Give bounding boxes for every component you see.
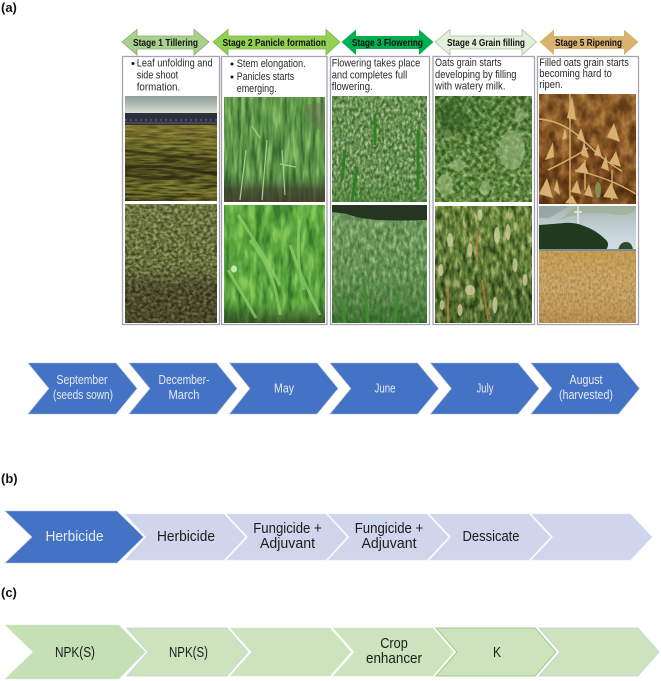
chevron: June (330, 363, 438, 414)
chevron: July (430, 363, 539, 414)
text: stage 1 description (132, 58, 213, 93)
photo: oat grains filling (435, 96, 532, 202)
panel: stage 2 panicle formation (222, 56, 327, 324)
chevron: NPK(S) (126, 628, 248, 676)
chevron: fungicide + adjuvant (226, 514, 347, 560)
chevron: September: September (56, 373, 108, 387)
text: stage 2 description (230, 58, 306, 95)
text: stage 3 description (332, 58, 420, 93)
text: stage 1 description: side shoot (137, 70, 178, 82)
timeline: months (28, 363, 640, 414)
chevron: K: K (493, 645, 501, 661)
panel: stage 5 ripening (538, 56, 638, 324)
chevron: December-March: December- (158, 373, 210, 387)
chevron: empty (539, 628, 659, 676)
chevron: NPK(S), highlighted: NPK(S) (55, 645, 95, 661)
arrow: stage 5 ripening: Stage 5 Ripening (555, 38, 622, 49)
arrow: stage 2 panicle formation: Stage 2 Panicle formation (222, 38, 326, 49)
text: stage 1 description: formation. (137, 81, 180, 93)
photo: young oat field (125, 96, 217, 201)
chevron: herbicide, highlighted (5, 511, 144, 563)
arrow: stage 1 tillering: Stage 1 Tillering (133, 38, 198, 49)
chevron row: fertiliser (5, 625, 659, 679)
text: stage 3 description: flowering. (332, 81, 373, 93)
panel: stage 4 grain filling (433, 56, 534, 324)
chevron: herbicide (125, 514, 246, 560)
text: stage 5 description: Filled oats grain starts (539, 57, 629, 69)
arrow: stage 1 tillering (122, 30, 209, 55)
label: panel b: (b) (1, 471, 18, 486)
panel: stage 3 flowering (330, 56, 430, 324)
chevron: December-March (129, 363, 237, 414)
text: stage 4 description: Oats grain starts (435, 57, 502, 69)
text: stage 2 description: Stem elongation. (237, 58, 306, 70)
chevron: September: (seeds sown) (53, 388, 113, 402)
photo: panicle formation close-up (224, 205, 325, 323)
chevron: dessicate (430, 514, 550, 560)
chevron: dessicate: Dessicate (462, 529, 520, 545)
text: stage 1 description: Leaf unfolding and (137, 58, 213, 70)
text: stage 5 description: becoming hard to (539, 68, 612, 80)
photo: filled oat panicles (435, 206, 532, 323)
text: stage 5 description: ripen. (539, 79, 563, 91)
photo: flowering field (332, 205, 427, 323)
arrow: stage 4 grain filling: Stage 4 Grain filling (447, 38, 525, 49)
chevron row: crop protection (5, 511, 652, 563)
chevron: fungicide + adjuvant: Adjuvant (260, 536, 315, 552)
text: stage 3 description: and completes full (332, 70, 407, 82)
text: stage 2 description: emerging. (237, 83, 277, 95)
chevron: August: August (570, 373, 603, 387)
photo: ripening oat heads (539, 94, 636, 204)
chevron: fungicide + adjuvant: Fungicide + (253, 521, 322, 537)
arrow: stage 4 grain filling (435, 30, 536, 55)
chevron: K (436, 628, 556, 676)
text: stage 4 description: with watery milk. (434, 81, 506, 93)
arrow: stage 3 flowering (342, 30, 434, 55)
chevron: December-March: March (168, 388, 200, 402)
text: stage 5 description (539, 57, 629, 91)
chevron: May: May (274, 382, 295, 396)
chevron: herbicide, highlighted: Herbicide (46, 529, 104, 545)
chevron: July: July (476, 382, 494, 396)
chevron: empty (532, 514, 652, 560)
label: panel c: (c) (1, 585, 17, 600)
chevron: crop enhancer (333, 628, 454, 676)
panel: stage 1 tillering (122, 56, 220, 324)
chevron: herbicide: Herbicide (157, 529, 215, 545)
chevron: crop enhancer: Crop (380, 636, 408, 652)
photo: flowering oats (332, 96, 427, 202)
chevron: NPK(S): NPK(S) (169, 645, 208, 661)
arrow: stage 2 panicle formation (213, 30, 340, 55)
chevron: empty (230, 628, 351, 676)
chevron: August (531, 363, 640, 414)
text: stage 2 description: Panicles starts (237, 71, 294, 83)
chevron: crop enhancer: enhancer (366, 651, 422, 667)
photo: harvest-ready field (539, 206, 636, 323)
photo: stem elongation (224, 97, 325, 202)
chevron: August: (harvested) (559, 388, 613, 402)
chevron: fungicide + adjuvant, second: Adjuvant (362, 536, 416, 552)
text: stage 3 description: Flowering takes place (332, 58, 420, 70)
chevron: fungicide + adjuvant, second (328, 514, 448, 560)
photo: tillering close-up (125, 204, 217, 323)
arrow: stage 3 flowering: Stage 3 Flowering (352, 38, 423, 49)
text: stage 4 description: developing by filling (435, 69, 517, 81)
label: panel a: (a) (1, 0, 17, 15)
chevron: September (28, 363, 137, 414)
arrow: stage 5 ripening (540, 30, 638, 55)
chevron: May (230, 363, 338, 414)
text: stage 4 description (434, 57, 517, 93)
chevron: fungicide + adjuvant, second: Fungicide + (355, 521, 423, 537)
chevron: NPK(S), highlighted (5, 625, 146, 679)
chevron: June: June (374, 382, 396, 396)
